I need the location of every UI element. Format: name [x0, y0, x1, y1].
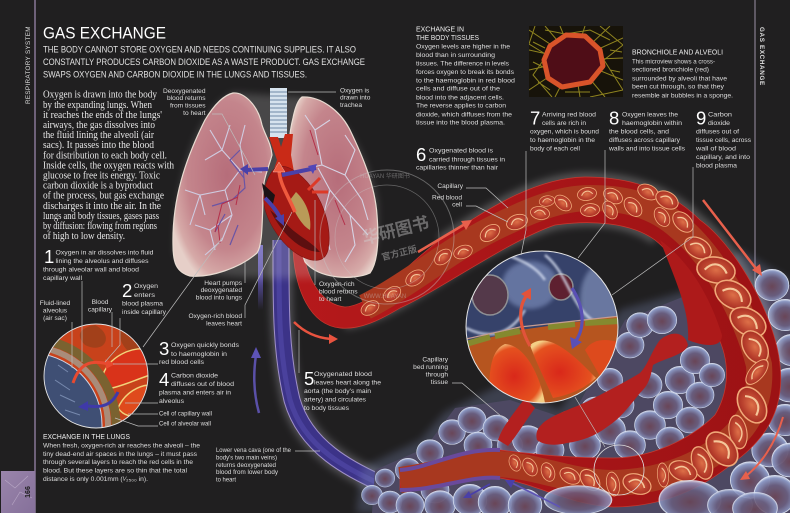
stamp watermark: HUAYAN 华研图书 — [360, 172, 410, 180]
lower vena cava vessel — [279, 240, 402, 492]
step 6: capillaries thinner than hair — [416, 165, 499, 172]
blue arrow: carbon dioxide — [88, 392, 118, 407]
tissue glow — [356, 250, 790, 513]
body text: the fluid lining the alveoli (air — [43, 130, 154, 141]
stamp watermark: 华研图书 — [360, 213, 431, 248]
foreground tissue cells over vessel — [544, 480, 777, 513]
arrowhead right — [308, 164, 317, 174]
title: GAS EXCHANGE — [43, 24, 166, 42]
exchange in the body tissues: tissue into the blood plasma. — [416, 120, 505, 127]
label: deoxygenated blood: from tissues — [170, 102, 206, 110]
red arrow up — [521, 294, 530, 346]
step 1: through alveolar wall and blood — [43, 266, 139, 274]
label: lower vena cava: Lower vena cava (one of the — [216, 447, 291, 454]
label: oxygen-rich returns to heart — [319, 281, 358, 303]
label: fluid-lined alveolus: alveolus — [43, 308, 68, 314]
label: oxygen trachea: drawn into — [340, 95, 371, 102]
label: oxygen-rich returns to heart: blood returns — [319, 288, 358, 296]
yellow alveoli network — [529, 26, 623, 97]
step 9: dioxide — [708, 120, 730, 127]
exchange in the body tissues: The reverse applies to carbon — [416, 103, 506, 110]
label: deoxygenated blood: Deoxygenated — [163, 88, 206, 95]
intro text: THE BODY CANNOT STORE OXYGEN AND NEEDS CONTINUING SUPPLIES. IT ALSO — [43, 44, 356, 56]
heart dark cavity — [262, 183, 275, 208]
left purple margin rule — [34, 0, 36, 513]
exchange in the lungs: When fresh, oxygen-rich air reaches the alveoli – the — [43, 442, 200, 450]
step 9: capillary, and into — [696, 154, 750, 161]
body text: it reaches the ends of the lungs' — [43, 110, 162, 121]
branch capillary — [536, 334, 688, 445]
pulmonary arteries — [269, 134, 294, 172]
label: lower vena cava: to heart — [216, 476, 236, 484]
step 5: aorta (the body's main — [304, 388, 371, 395]
arrow: bottom left — [463, 484, 490, 498]
page number tab — [1, 471, 35, 513]
body text: sacs). It passes into the blood — [43, 140, 155, 151]
wedge wall of vessel — [660, 240, 722, 345]
body text: by the expanding lungs. When — [43, 100, 153, 111]
label: fluid-lined alveolus: Fluid-lined — [40, 300, 71, 307]
body text: of high to low density. — [43, 231, 125, 242]
bronchiole and alveoli text: surrounded by alveoli that have — [632, 75, 727, 82]
body text — [43, 90, 175, 242]
step 6: 6 — [416, 144, 426, 165]
step 1: Oxygen in air dissolves into fluid — [56, 249, 154, 256]
exchange in the body tissues: Oxygen levels are higher in the — [416, 43, 510, 50]
left lung — [173, 93, 272, 276]
blue arrowhead down — [275, 214, 284, 226]
step 4: alveolus — [159, 398, 185, 405]
blue arrowhead left lung — [240, 164, 248, 175]
label: heart pumps: Heart pumps — [204, 280, 243, 287]
step 9 — [695, 108, 752, 169]
arrow: right of capillary — [703, 200, 762, 276]
label: red blood cell: Red blood — [432, 194, 462, 202]
label: capillary bed: tissue — [431, 379, 448, 386]
label: blood capillary: Blood — [92, 299, 109, 306]
label: oxygen trachea — [340, 87, 371, 109]
step 7: body of each cell — [530, 145, 581, 152]
step 7 — [530, 108, 599, 152]
step 4: Carbon dioxide — [171, 372, 218, 380]
arrow: lower right curve — [740, 417, 783, 480]
bronchiole and alveoli text: BRONCHIOLE AND ALVEOLI — [632, 48, 723, 57]
blue arrowhead — [78, 401, 88, 411]
step 2: inside capillary — [122, 309, 167, 316]
step 8: the blood cells, and — [609, 128, 669, 135]
step 1 — [43, 246, 154, 282]
step 1: 1 — [44, 246, 54, 267]
left lung airway tree — [185, 125, 262, 255]
bronchiole wall — [544, 35, 603, 87]
label: oxygen-rich leaves heart: leaves heart — [206, 320, 242, 328]
step 2: enters — [134, 292, 156, 299]
label: capillary bed: Capillary — [422, 356, 449, 364]
leader lines — [72, 92, 693, 451]
label: oxygen-rich leaves heart: Oxygen-rich blood — [188, 313, 242, 320]
label: capillary: Capillary — [437, 183, 464, 190]
stamp watermark: WWW.HUAYAN — [364, 294, 406, 300]
step 1: lining the alveolus and diffuses — [56, 258, 149, 265]
step 5: Oxygenated blood — [314, 371, 372, 378]
step 3: 3 — [159, 338, 169, 359]
step 4: plasma and enters air in — [159, 390, 231, 397]
big circle inset: tissue cells and capillary — [466, 250, 618, 404]
exchange in the body tissues: to the haemoglobin in red blood — [416, 77, 515, 84]
step 8: 8 — [609, 108, 619, 129]
label: capillary bed: bed running — [413, 364, 448, 371]
step 8 — [608, 108, 686, 152]
label: deoxygenated blood: blood returns — [167, 95, 206, 102]
step 2: blood plasma — [122, 300, 163, 308]
stamp watermark — [320, 170, 454, 304]
exchange in the body tissues: blood than in surrounding — [416, 52, 495, 59]
body text: of the process, but gas exchange — [43, 191, 164, 202]
step 9: blood plasma — [696, 162, 737, 169]
bronchiole and alveoli text: been cut through, so that they — [632, 84, 725, 91]
exchange in the body tissues: THE BODY TISSUES — [416, 33, 479, 42]
lower purple edge of vessel — [400, 450, 500, 490]
label: cell of alveolar wall: Cell of alveolar wall — [159, 420, 211, 428]
intro text: SWAPS OXYGEN AND CARBON DIOXIDE IN THE LUNGS AND TISSUES. — [43, 70, 307, 80]
arrow: oxygenated blood leaves heart — [294, 322, 338, 344]
step 8: Oxygen leaves the — [622, 111, 678, 118]
step 7: Arriving red blood — [542, 111, 596, 118]
step 9: diffuses out of — [696, 128, 739, 135]
step 4: diffuses out of blood — [171, 381, 234, 388]
body text: glucose to free its energy. Toxic — [43, 170, 160, 182]
stamp watermark: 官方正版 — [380, 243, 418, 262]
circle inset: alveolus — [44, 324, 148, 428]
step 3: red blood cells — [159, 359, 205, 366]
exchange in the lungs: distance is only 0.001mm (¹⁄₂₅₀₀ in). — [43, 476, 148, 483]
step 6: Oxygenated blood is — [429, 148, 494, 155]
red arrow: oxygen — [73, 362, 108, 383]
body text: by diffusion: flowing from regions — [43, 221, 157, 232]
bronchiole micrograph — [529, 26, 623, 97]
red arrowhead up — [521, 288, 531, 300]
heart chamber — [290, 192, 310, 230]
step 4: 4 — [159, 369, 169, 390]
body text: Oxygen is drawn into the body — [43, 90, 158, 101]
step 2: 2 — [122, 280, 132, 301]
label: heart pumps — [196, 280, 243, 302]
right lung — [289, 97, 378, 277]
exchange in the lungs: tiny dead-end air spaces in the lungs – it must pass — [43, 451, 198, 458]
bronchiole and alveoli text — [632, 48, 733, 99]
red arrows at right — [308, 178, 328, 192]
capillary lumen — [365, 198, 759, 483]
step 4 — [159, 369, 234, 405]
arrowhead up — [273, 162, 285, 172]
exchange in the lungs — [43, 432, 200, 483]
exchange in the body tissues: dioxide, which diffuses from the — [416, 111, 512, 118]
label: oxygen trachea: trachea — [340, 102, 362, 109]
step 8: diffuses across capillary — [609, 137, 681, 144]
bronchiole and alveoli text: resemble air bubbles in a sponge. — [632, 92, 733, 99]
page number tab: 166 — [25, 486, 32, 498]
step 7: cells are rich in — [542, 120, 586, 127]
right lung airway tree — [300, 115, 368, 262]
label: lower vena cava: returns deoxygenated — [216, 462, 276, 469]
step 6 — [416, 144, 505, 172]
arrow: bottom to vein — [505, 480, 560, 507]
trachea — [270, 88, 287, 138]
label: lower vena cava: blood from lower body — [216, 469, 279, 476]
step 2 — [122, 280, 167, 316]
step 7: oxygen, which is bound — [530, 128, 599, 135]
label: oxygen-rich returns to heart: to heart — [319, 296, 342, 303]
step 7: 7 — [530, 108, 540, 129]
lung glow — [175, 93, 378, 278]
section tab: gas exchange: GAS EXCHANGE — [758, 27, 765, 86]
body text: airways, the gas dissolves into — [43, 120, 155, 131]
step 5: to body tissues — [304, 405, 350, 412]
label: cell of capillary wall: Cell of capillary wall — [159, 410, 212, 418]
body text: carbon dioxide is a byproduct — [43, 181, 153, 192]
vena cava glow — [281, 250, 402, 492]
right margin rule — [754, 0, 756, 513]
blue pulmonary arrow — [282, 168, 316, 175]
exchange in the body tissues: tissues. The difference in levels — [416, 60, 510, 67]
heart — [240, 162, 329, 260]
arrow: into capillary — [418, 220, 472, 252]
exchange in the body tissues: blood into the adjacent cells. — [416, 94, 504, 101]
step 9: tissue cells, across — [696, 137, 752, 144]
exchange in the lungs: EXCHANGE IN THE LUNGS — [43, 432, 130, 441]
step 3: Oxygen quickly bonds — [171, 342, 240, 349]
label: fluid-lined alveolus: (air sac) — [43, 315, 67, 322]
right lung vessels — [310, 130, 345, 245]
exchange in the lungs: through several layers to reach the red cells in the — [43, 459, 193, 466]
label: blood capillary — [88, 299, 113, 314]
red arrow in heart — [279, 170, 295, 212]
capillary glow — [345, 177, 780, 365]
step 8: walls and into tissue cells — [608, 145, 686, 152]
step 7: to haemoglobin in the — [530, 137, 595, 144]
exchange in the body tissues: forces oxygen to break its bonds — [416, 69, 515, 76]
blue arrow down — [572, 288, 582, 342]
blue arrow into heart — [265, 198, 282, 222]
label: red blood cell: cell — [452, 202, 463, 209]
blue arrow left lung — [246, 169, 268, 170]
label: oxygen-rich leaves heart — [188, 313, 242, 328]
bronchiole and alveoli text: This microview shows a cross- — [632, 58, 715, 65]
blue arrowhead down — [570, 337, 582, 349]
step 5: 5 — [304, 368, 314, 389]
label: oxygen trachea: Oxygen is — [340, 87, 370, 94]
label: red blood cell — [432, 194, 463, 209]
step 5 — [304, 368, 381, 412]
bronchiole and alveoli text: sectioned bronchiole (red) — [632, 67, 709, 74]
label: lower vena cava — [216, 447, 291, 484]
small magnifier circle on capillary — [594, 445, 644, 495]
label: lower vena cava: body's two main veins) — [216, 454, 277, 462]
step 6: carried through tissues in — [429, 156, 505, 163]
arrow: blood returning up vena cava — [251, 347, 261, 413]
step 3: to haemoglobin in — [171, 351, 227, 358]
section tab: respiratory system: RESPIRATORY SYSTEM — [25, 26, 32, 104]
step 8: haemoglobin within — [622, 120, 682, 127]
step 1: capillary wall — [43, 275, 83, 282]
step 9: 9 — [696, 108, 706, 129]
label: heart pumps: blood into lungs — [196, 294, 243, 302]
label: blood capillary: capillary — [88, 306, 113, 314]
tissue cells — [362, 269, 790, 513]
red blood cells — [358, 181, 774, 498]
step 9: wall of blood — [695, 145, 736, 152]
step 5: artery) and circulates — [304, 397, 367, 404]
exchange in the body tissues — [416, 24, 515, 127]
left lung vessels — [212, 150, 245, 245]
body text: for distribution to each body cell. — [43, 150, 167, 161]
small pulmonary vessel — [258, 245, 263, 310]
label: oxygen-rich returns to heart: Oxygen-rich — [319, 281, 355, 288]
capillary vessel — [293, 177, 781, 507]
exchange in the body tissues: EXCHANGE IN — [416, 24, 464, 34]
red arrowhead — [105, 359, 115, 369]
exchange in the body tissues: cells and diffuse out of the — [416, 86, 500, 93]
label: capillary bed: through — [426, 371, 448, 378]
body text: discharges it into the air. In the — [43, 201, 161, 212]
label: deoxygenated blood: to heart — [183, 110, 206, 117]
step 3 — [159, 338, 240, 366]
body text: Inside cells, the oxygen reacts with — [43, 160, 175, 171]
label: capillary bed — [413, 356, 449, 386]
intro text: CONSTANTLY PRODUCES CARBON DIOXIDE AS A WASTE PRODUCT. GAS EXCHANGE — [43, 57, 365, 68]
step 5: leaves heart along the — [314, 380, 381, 387]
intro text — [43, 44, 365, 80]
lower left capillary branch — [498, 398, 535, 446]
label: fluid-lined alveolus — [40, 300, 71, 322]
step 2: Oxygen — [134, 283, 158, 290]
label: deoxygenated blood — [163, 88, 206, 117]
exchange in the lungs: blood. But these layers are so thin that the total — [43, 468, 188, 475]
step 9: Carbon — [708, 111, 732, 118]
body text: lungs and body tissues, gases pass — [43, 211, 159, 222]
label: heart pumps: deoxygenated — [201, 287, 242, 294]
